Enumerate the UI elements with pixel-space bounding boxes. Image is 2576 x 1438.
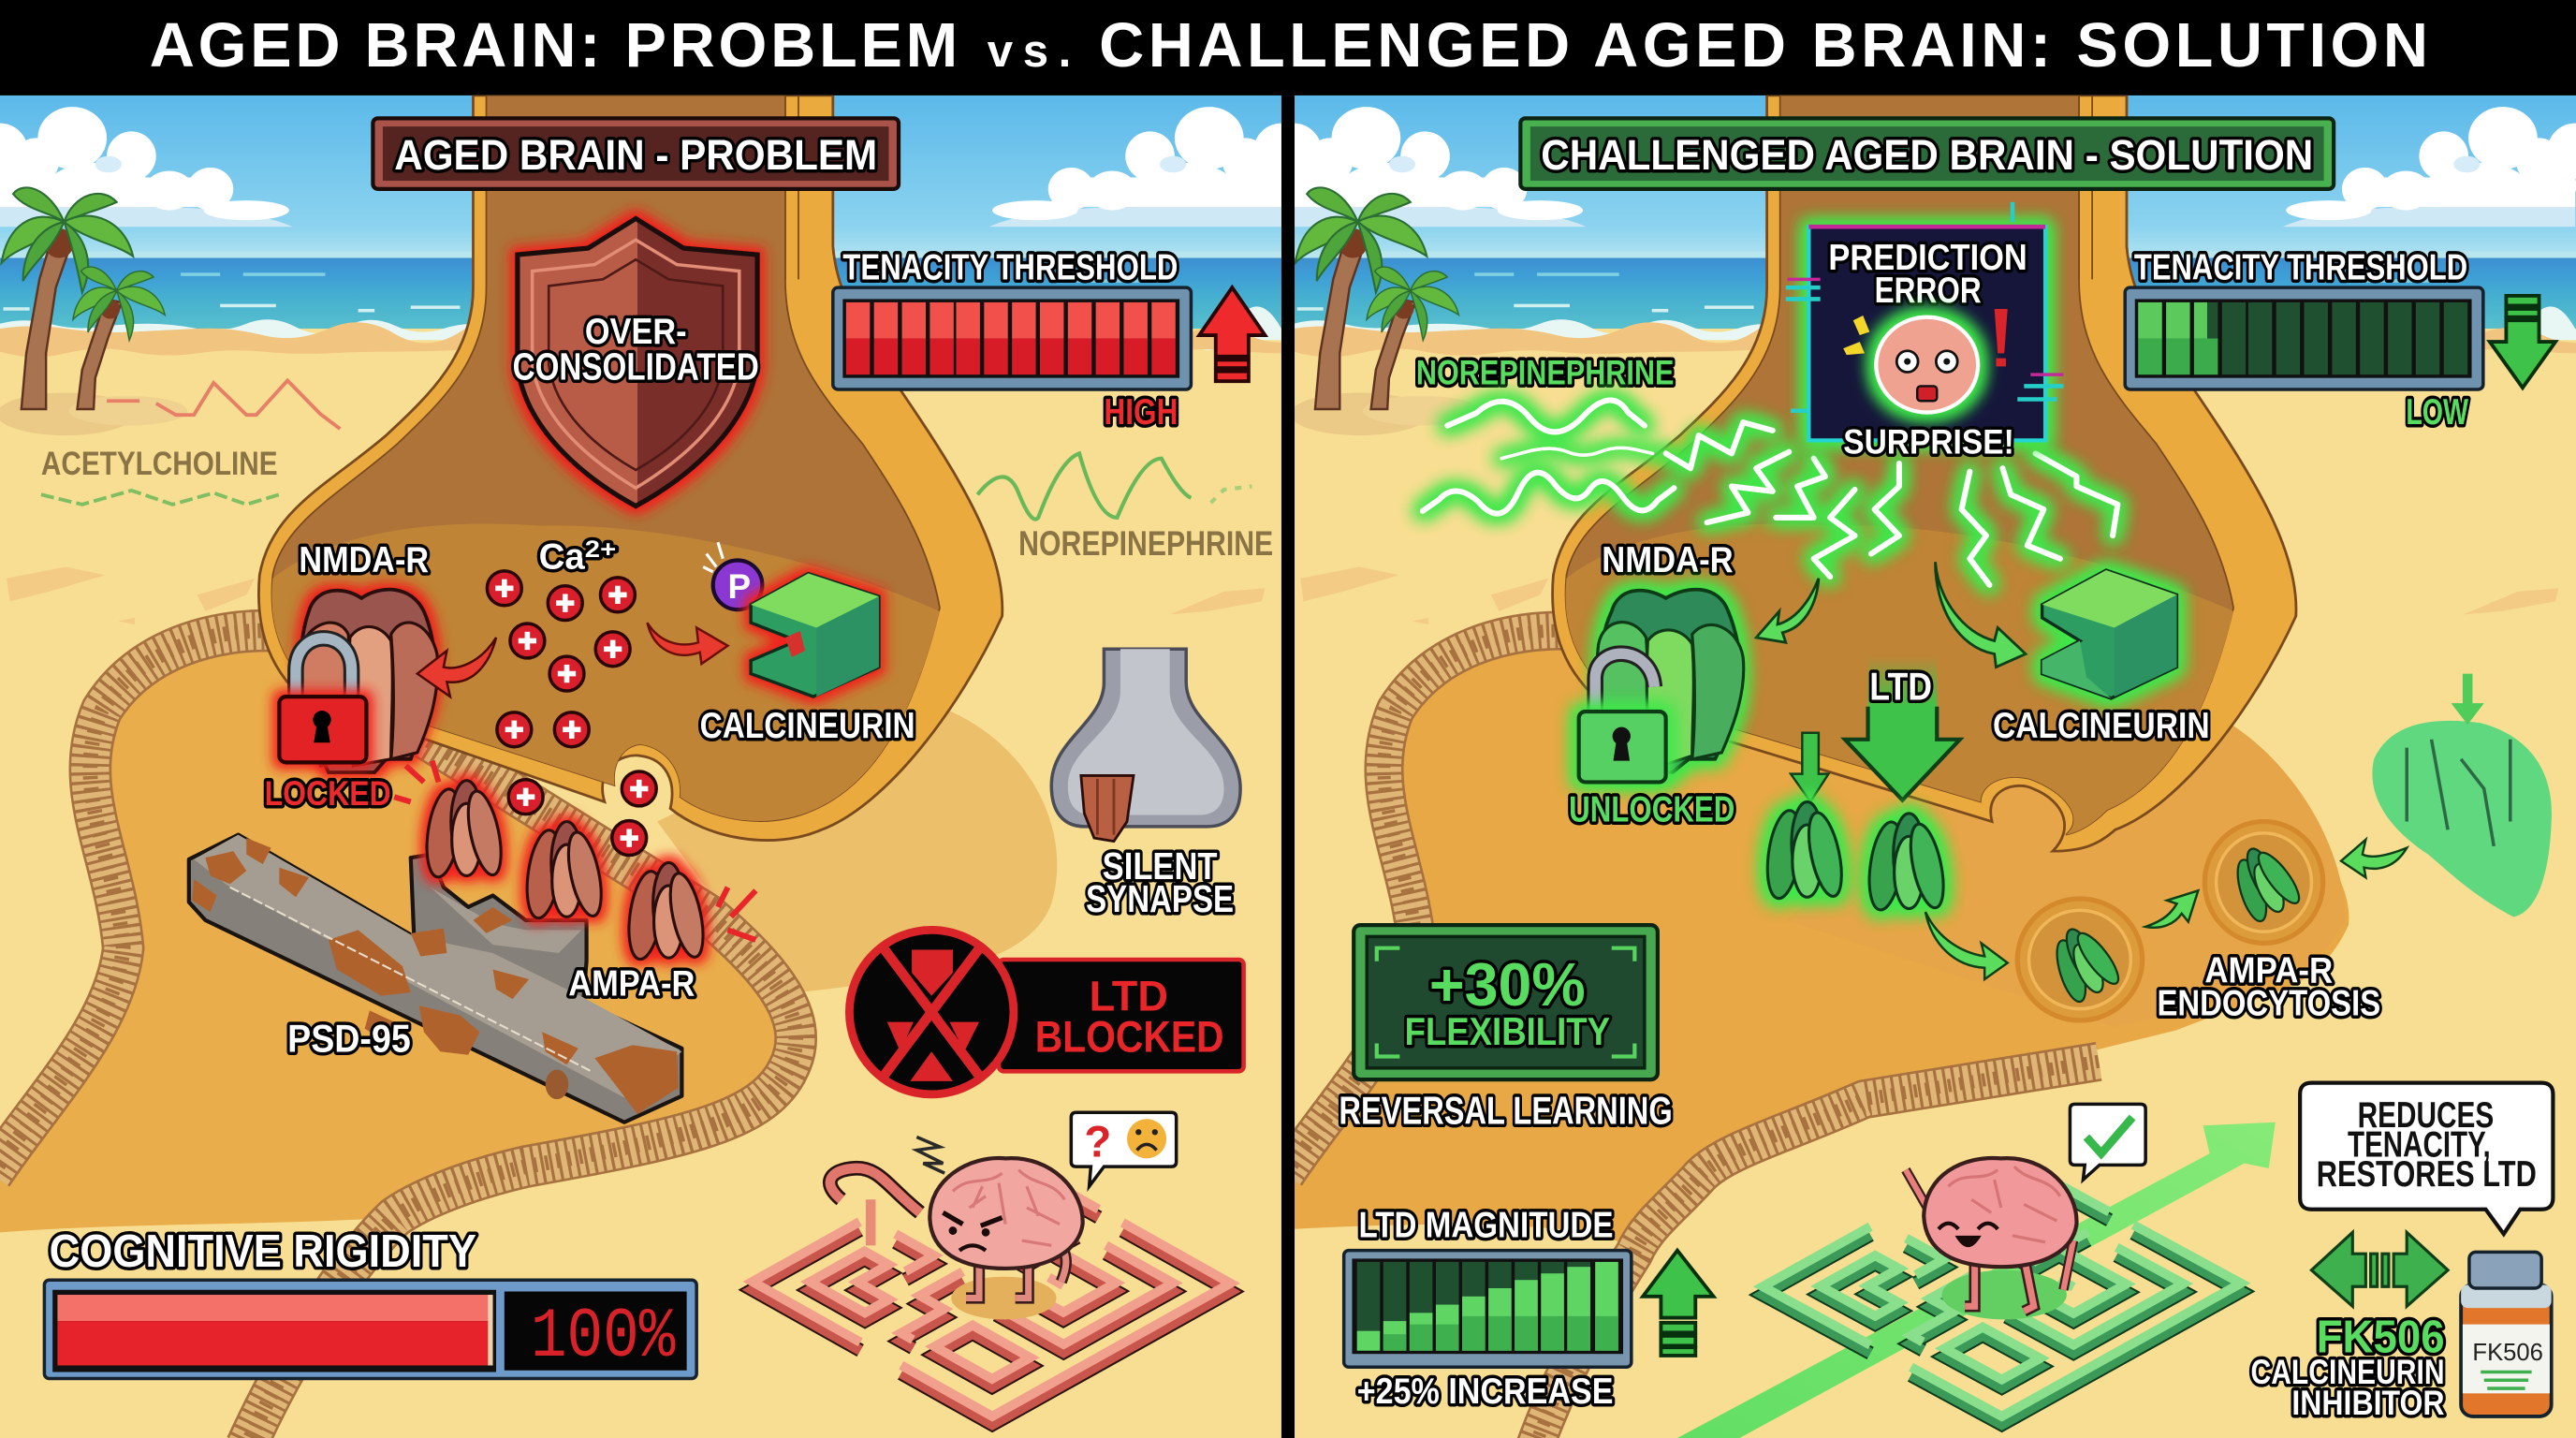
- level: high: HIGH: [1104, 392, 1178, 433]
- red maze: [753, 1149, 1231, 1425]
- dendrite shaft region: [0, 633, 794, 1232]
- calcineurin active: [2042, 570, 2177, 698]
- banner: challenged aged brain solution: [1520, 118, 2334, 189]
- flexibility panel: [1354, 925, 1658, 1079]
- tenacity threshold meter: low: [2125, 247, 2555, 433]
- check speech bubble: [2070, 1104, 2145, 1180]
- fk506 bottle: [2461, 1252, 2552, 1416]
- calcium ions: [487, 536, 656, 856]
- title: CHALLENGED AGED BRAIN: SOLUTION: [1099, 11, 2428, 81]
- green maze: [1763, 1153, 2241, 1425]
- synapse halo: [657, 698, 1057, 994]
- ltd blocked badge: LTD: [1090, 972, 1168, 1020]
- calcium ions: 2+: [585, 537, 616, 563]
- calcium ions: Ca: [539, 536, 585, 577]
- frustrated brain: [916, 1137, 1083, 1319]
- banner: aged brain problem: AGED BRAIN - PROBLEM: [394, 131, 877, 179]
- vesicle one: [2017, 899, 2143, 1020]
- padlock closed: [279, 638, 366, 762]
- dendritic spine head: [1553, 95, 2296, 851]
- nmda receptor locked: [299, 590, 438, 772]
- calcineurin label: CALCINEURIN: [1993, 706, 2210, 746]
- arrow from degraded receptor: [2341, 840, 2407, 877]
- flexibility panel: +30%: [1429, 950, 1586, 1019]
- reversal learning label: REVERSAL LEARNING: [1339, 1088, 1673, 1132]
- locked label: LOCKED: [265, 774, 391, 813]
- nmda receptor label: NMDA-R: [299, 540, 429, 580]
- panel: challenged aged brain solution: [1266, 95, 2576, 1438]
- banner: aged brain problem: [373, 118, 899, 189]
- arrow to calcineurin: [1936, 562, 2026, 668]
- silent synapse label: SYNAPSE: [1086, 877, 1234, 920]
- ltd arrow: [1845, 655, 1960, 800]
- confused speech bubble: [1071, 1112, 1177, 1186]
- centre divider: [1281, 95, 1295, 1438]
- endocytosis label: ENDOCYTOSIS: [2157, 984, 2380, 1024]
- dendrite shaft region: [1294, 633, 2349, 1254]
- double arrow: [2311, 1232, 2448, 1306]
- shield: over-consolidated: OVER-: [585, 312, 687, 352]
- ltd blocked badge: [849, 930, 1244, 1094]
- endocytosis label: [2157, 951, 2380, 1024]
- nmda-r label: NMDA-R: [1602, 540, 1734, 580]
- silent synapse label: [1086, 844, 1234, 920]
- arrow up: [1199, 287, 1265, 381]
- confused speech bubble: ?: [1084, 1118, 1111, 1167]
- banner: challenged aged brain solution: CHALLENGED AGED BRAIN - SOLUTION: [1541, 131, 2313, 179]
- success path arrow: [1662, 1123, 2276, 1438]
- fk506 bottle: FK506: [2472, 1338, 2543, 1366]
- arrow up: [1643, 1251, 1714, 1356]
- ampa receptors: [422, 781, 710, 961]
- membrane band: [1285, 631, 2099, 1438]
- ampa receptors leaving synapse: [1763, 801, 1950, 912]
- ltd magnitude bar chart: [1344, 1251, 1632, 1367]
- tenacity threshold meter: high: [833, 247, 1265, 433]
- phospho group: [703, 542, 762, 609]
- meter label: TENACITY THRESHOLD: [2134, 247, 2467, 287]
- degraded receptor blob: [2372, 674, 2552, 917]
- fk506 label: FK506: [2317, 1312, 2445, 1362]
- shield: over-consolidated: CONSOLIDATED: [513, 345, 759, 388]
- title: vs.: [988, 26, 1071, 77]
- yellow burst: [1843, 315, 1869, 355]
- dendritic spine head: [258, 95, 1003, 841]
- vesicle two: [2204, 822, 2323, 943]
- callout: reduces tenacity: [2300, 1083, 2553, 1234]
- cognitive rigidity meter: [44, 1280, 696, 1379]
- phospho group: P: [728, 567, 751, 606]
- arrow to nmda receptor: [417, 638, 496, 697]
- nmda receptor open: [1597, 590, 1744, 772]
- exclamation mark: [1995, 309, 2008, 366]
- callout: reduces tenacity: REDUCES: [2358, 1095, 2494, 1136]
- prediction error box: PREDICTION: [1828, 238, 2027, 278]
- membrane band: [0, 631, 796, 1438]
- glowing norepinephrine label: NOREPINEPHRINE: [1416, 354, 1674, 392]
- calcineurin inactive: [751, 574, 879, 697]
- meter bar: [833, 287, 1191, 389]
- silent synapse icon: [1051, 649, 1240, 842]
- endocytosis arrow to first vesicle: [1925, 912, 2008, 979]
- flexibility panel: FLEXIBILITY: [1405, 1009, 1610, 1053]
- arrow to nmda receptor: [1756, 579, 1819, 642]
- panel: aged brain problem: [0, 95, 1331, 1438]
- title: AGED BRAIN: PROBLEM: [150, 11, 958, 81]
- small arrow into ampa receptor: [1791, 733, 1828, 801]
- acetylcholine faint waves: [41, 380, 340, 505]
- shield: over-consolidated: [513, 218, 759, 506]
- surprised brain: [1876, 317, 1978, 413]
- beach background scene: [1266, 95, 2576, 1438]
- increase label: +25% INCREASE: [1357, 1372, 1614, 1412]
- padlock open: [1579, 653, 1666, 782]
- red spark marks: [394, 761, 755, 940]
- acetylcholine label: ACETYLCHOLINE: [41, 446, 278, 482]
- arrow to calcineurin: [648, 623, 728, 664]
- calcineurin label: CALCINEURIN: [700, 706, 915, 746]
- fk506 label: INHIBITOR: [2291, 1384, 2445, 1422]
- psd-95 rusted scaffold: [189, 835, 681, 1123]
- fk506 label: CALCINEURIN: [2250, 1353, 2445, 1391]
- endocytosis label: AMPA-R: [2204, 951, 2333, 991]
- ltd magnitude label: LTD MAGNITUDE: [1358, 1206, 1614, 1246]
- ampa-r label: AMPA-R: [568, 964, 695, 1005]
- ltd label: LTD: [1869, 665, 1932, 709]
- synapse halo: [1787, 707, 2345, 1027]
- arrow between vesicles: [2145, 890, 2198, 928]
- title: [150, 11, 2428, 81]
- prediction error box: ERROR: [1875, 271, 1982, 311]
- arrow down: [2490, 296, 2555, 388]
- level: low: LOW: [2406, 392, 2468, 433]
- callout: reduces tenacity: TENACITY,: [2348, 1125, 2491, 1166]
- meter label: TENACITY THRESHOLD: [842, 247, 1178, 287]
- prediction error box: SURPRISE!: [1843, 422, 2014, 461]
- ltd blocked badge: BLOCKED: [1035, 1012, 1224, 1062]
- beach background scene: [0, 95, 1331, 1438]
- cognitive rigidity meter: 100%: [531, 1297, 676, 1377]
- unlocked label: UNLOCKED: [1569, 790, 1734, 830]
- norepinephrine faint wave: [977, 453, 1273, 563]
- meter bar: [2125, 287, 2483, 389]
- cognitive rigidity label: COGNITIVE RIGIDITY: [50, 1226, 476, 1277]
- fk506 label: [2250, 1312, 2445, 1422]
- silent synapse label: SILENT: [1103, 844, 1218, 888]
- psd-95 label: PSD-95: [287, 1016, 411, 1060]
- norepinephrine label: NOREPINEPHRINE: [1018, 524, 1273, 563]
- happy brain: [1906, 1158, 2077, 1319]
- norepinephrine glowing waves and signal squiggles: [1423, 401, 2117, 585]
- prediction error box: [1786, 202, 2063, 461]
